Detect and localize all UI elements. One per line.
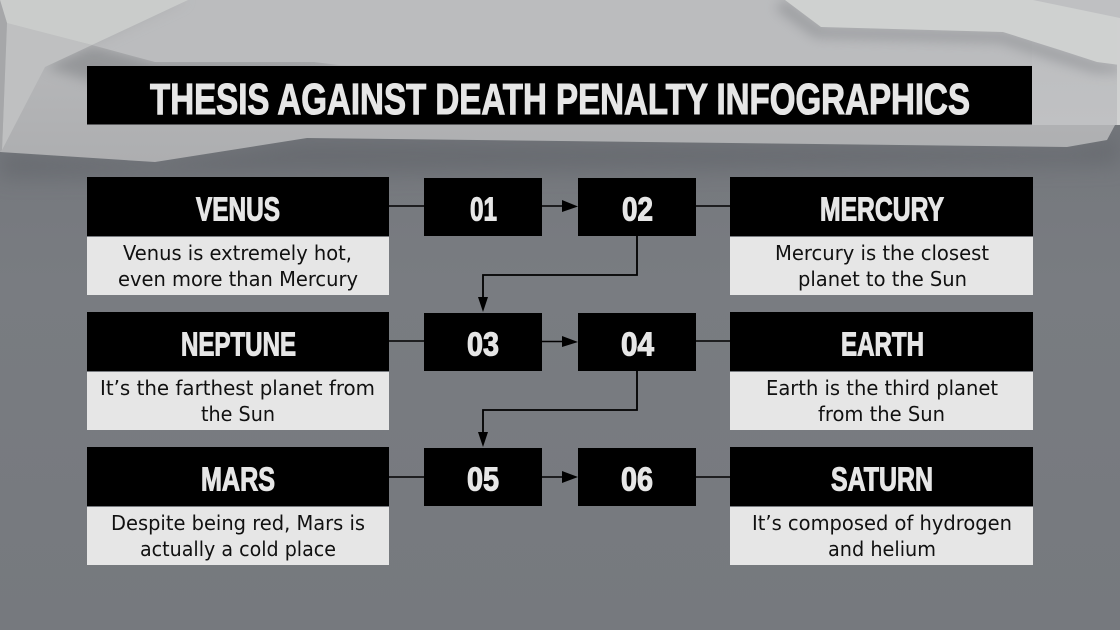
panel: Venus (87, 177, 389, 295)
number box 06: 06 (621, 460, 653, 498)
panel: Neptune (87, 312, 389, 430)
connector: 04 to Earth (696, 340, 730, 342)
panel: Venus: VENUS (196, 190, 280, 228)
arrow: 04 to 05 (478, 371, 637, 447)
connector: Venus to 01 (389, 205, 424, 207)
panel: Earth (730, 312, 1033, 430)
connector: Neptune to 03 (389, 340, 424, 342)
panel: Neptune: It’s the farthest planet from (100, 376, 375, 400)
panel: Mars (87, 447, 389, 565)
connector: 06 to Saturn (696, 476, 730, 478)
number box 05: 05 (467, 460, 499, 498)
panel: Saturn: SATURN (831, 460, 933, 498)
number box 02: 02 (622, 190, 653, 228)
number box 03: 03 (467, 326, 499, 362)
number box 01 (424, 178, 542, 236)
connector: Mars to 05 (389, 476, 424, 478)
panel: Venus: Venus is extremely hot, (123, 241, 352, 265)
arrow: 01 to 02 (542, 200, 578, 212)
panel: Mercury (730, 177, 1033, 295)
number box 04: 04 (621, 326, 655, 362)
arrow: 02 to 03 (478, 236, 637, 312)
panel: Saturn: It’s composed of hydrogen (752, 511, 1012, 535)
panel: Mercury: planet to the Sun (798, 267, 967, 291)
panel: Saturn (730, 447, 1033, 565)
number box 06 (578, 448, 696, 506)
panel: Earth: from the Sun (818, 402, 945, 426)
panel: Saturn: and helium (828, 537, 936, 561)
panel: Neptune: the Sun (201, 402, 275, 426)
number box 05 (424, 448, 542, 506)
number box 03 (424, 313, 542, 371)
number box 04 (578, 313, 696, 371)
number box 01: 01 (470, 190, 497, 228)
connector: 02 to Mercury (696, 205, 730, 207)
panel: Mercury: Mercury is the closest (775, 241, 989, 265)
panel: Mars: MARS (201, 460, 275, 498)
panel: Venus: even more than Mercury (118, 267, 358, 291)
arrow: 05 to 06 (542, 471, 578, 483)
panel: Mars: actually a cold place (140, 537, 336, 561)
arrow: 03 to 04 (542, 336, 578, 347)
panel: Mars: Despite being red, Mars is (111, 511, 365, 535)
panel: Neptune: NEPTUNE (181, 326, 296, 362)
number box 02 (578, 178, 696, 236)
panel: Mercury: MERCURY (820, 190, 944, 228)
panel: Earth: EARTH (841, 326, 924, 362)
panel: Earth: Earth is the third planet (766, 376, 998, 400)
